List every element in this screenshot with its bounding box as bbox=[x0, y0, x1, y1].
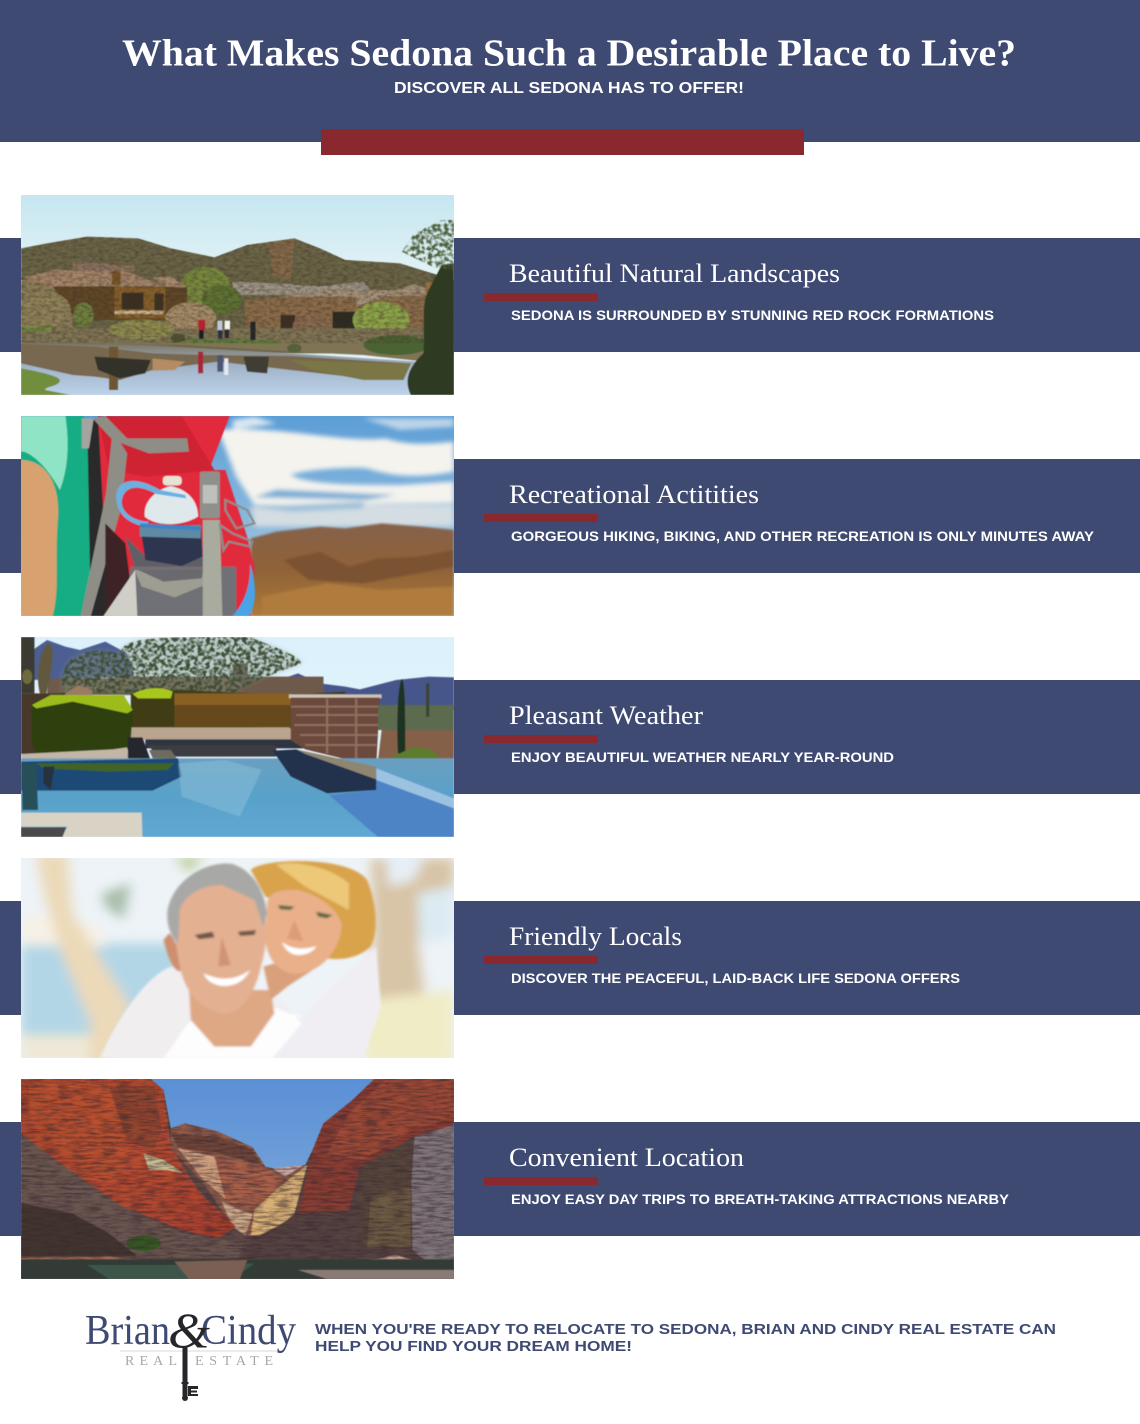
logo tagline: ESTATE bbox=[195, 1354, 273, 1369]
logo: Brian & Cindy Real Estate bbox=[85, 1302, 296, 1401]
panel: beautiful natural landscapes bbox=[0, 195, 1140, 395]
panel: pleasant weather bbox=[0, 637, 1140, 837]
header banner bbox=[0, 0, 1140, 155]
logo wordmark: Brian bbox=[85, 1308, 170, 1354]
header accent bar bbox=[321, 129, 804, 155]
photo: red rock canyon and river bbox=[21, 1079, 454, 1279]
logo tagline: REAL bbox=[125, 1354, 177, 1369]
description: ENJOY BEAUTIFUL WEATHER NEARLY YEAR-ROUND bbox=[511, 750, 894, 765]
band left stub bbox=[0, 901, 22, 1015]
logo tagline bbox=[125, 1354, 273, 1369]
logo divider bbox=[120, 1350, 277, 1352]
band left stub bbox=[0, 680, 22, 794]
closing call to action bbox=[315, 1322, 1056, 1355]
description: GORGEOUS HIKING, BIKING, AND OTHER RECREATION IS ONLY MINUTES AWAY bbox=[511, 529, 1094, 544]
band left stub bbox=[0, 238, 22, 352]
band bbox=[454, 1122, 1140, 1236]
subtitle: DISCOVER ALL SEDONA HAS TO OFFER! bbox=[394, 80, 744, 97]
photo: hiker backpack with water bottle bbox=[21, 416, 454, 616]
band left stub bbox=[0, 459, 22, 573]
closing call to action: WHEN YOU'RE READY TO RELOCATE TO SEDONA, BRIAN AND CINDY REAL ESTATE CAN bbox=[315, 1322, 1056, 1338]
accent bar bbox=[484, 1177, 598, 1185]
heading: Beautiful Natural Landscapes bbox=[509, 259, 840, 288]
band bbox=[454, 901, 1140, 1015]
logo wordmark bbox=[85, 1308, 296, 1354]
closing call to action: HELP YOU FIND YOUR DREAM HOME! bbox=[315, 1339, 632, 1355]
photo: homes by a lake under desert hills bbox=[21, 195, 454, 395]
accent bar bbox=[484, 514, 598, 522]
heading: Recreational Actitities bbox=[509, 480, 759, 509]
icon: ampersand key bbox=[168, 1302, 210, 1401]
title: What Makes Sedona Such a Desirable Place to Live? bbox=[122, 32, 1016, 74]
description: SEDONA IS SURROUNDED BY STUNNING RED ROCK FORMATIONS bbox=[511, 308, 994, 323]
panel: friendly locals bbox=[0, 853, 1140, 1063]
icon: ampersand key: & bbox=[168, 1302, 210, 1358]
accent bar bbox=[484, 293, 598, 301]
description: DISCOVER THE PEACEFUL, LAID-BACK LIFE SEDONA OFFERS bbox=[511, 971, 960, 986]
heading: Friendly Locals bbox=[509, 922, 682, 951]
accent bar bbox=[484, 735, 598, 743]
band bbox=[454, 238, 1140, 352]
accent bar bbox=[484, 956, 598, 964]
photo: smiling couple bbox=[21, 858, 454, 1058]
panel: recreational activities bbox=[0, 416, 1140, 616]
heading: Convenient Location bbox=[509, 1143, 744, 1172]
panel: convenient location bbox=[0, 1079, 1140, 1279]
heading: Pleasant Weather bbox=[509, 701, 703, 730]
logo wordmark: Cindy bbox=[201, 1308, 296, 1354]
description: ENJOY EASY DAY TRIPS TO BREATH-TAKING ATTRACTIONS NEARBY bbox=[511, 1192, 1009, 1207]
band bbox=[454, 680, 1140, 794]
band left stub bbox=[0, 1122, 22, 1236]
band bbox=[454, 459, 1140, 573]
photo: infinity pool in the desert bbox=[21, 637, 454, 837]
